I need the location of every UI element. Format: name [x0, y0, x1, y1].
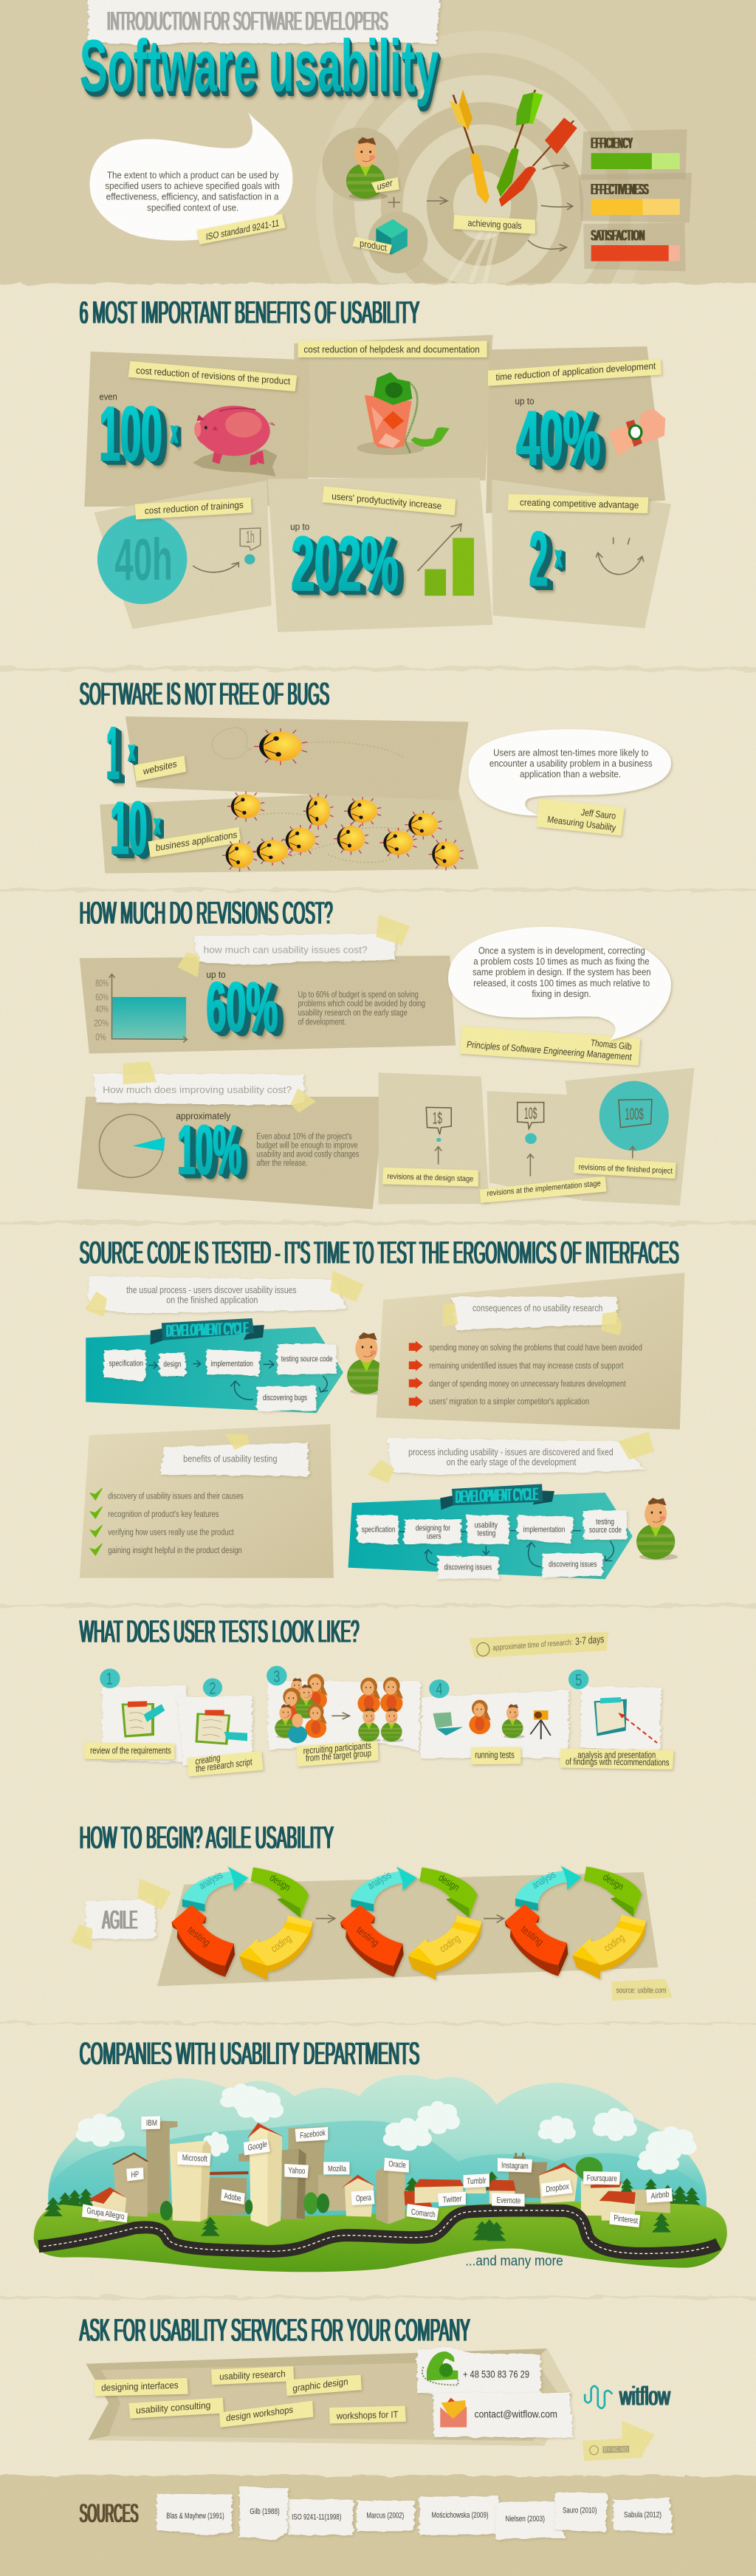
stat: 1x [106, 710, 135, 796]
label: users' prodytuctivity increase [331, 491, 441, 512]
chart: 60%: 40% [95, 1004, 109, 1015]
cycle labels: design [436, 1871, 461, 1893]
section: test ergonomics: discovery of usability issues and their causes [108, 1491, 244, 1501]
step 5 [560, 1670, 673, 1770]
stat: 100x: even [100, 392, 117, 402]
tape [71, 1878, 171, 1950]
chart: 60%: 20% [94, 1018, 109, 1029]
paper heading [194, 934, 396, 965]
service labels: workshops for IT [336, 2410, 398, 2422]
icon: telephone in a cup [357, 372, 450, 455]
paper heading [453, 1296, 617, 1330]
contact: phone [417, 2347, 541, 2398]
stage: 1$: 1$ [433, 1109, 442, 1128]
contact: email [433, 2393, 572, 2438]
cycle labels: coding [268, 1932, 293, 1954]
tape: research time [469, 1631, 608, 1658]
step 4: running tests [475, 1750, 515, 1761]
tape [443, 1303, 622, 1335]
section: services [80, 2312, 673, 2540]
source notes: Sabula (2012) [624, 2510, 662, 2519]
tape [85, 1271, 364, 1317]
speech bubble: Sauro: application than a website. [520, 769, 621, 780]
stage: 1$ [382, 1107, 478, 1187]
panel: consequences [376, 1272, 684, 1430]
label: source [537, 799, 625, 836]
source notes: Sauro (2010) [563, 2506, 597, 2515]
tape [177, 914, 410, 977]
cycle labels: testing [519, 1923, 546, 1948]
section: agile: AGILE [102, 1905, 137, 1934]
source notes: ISO 9241-11(1998) [292, 2512, 341, 2521]
stat: 10x [111, 786, 160, 871]
step 1: 1 [106, 1670, 113, 1688]
section: revision cost: 60% [207, 967, 278, 1046]
label: achieving goals: achieving goals [467, 218, 522, 231]
step 3: 3 [273, 1668, 280, 1685]
paper: usual process [89, 1276, 346, 1313]
text block: of development. [298, 1016, 346, 1027]
tape: source [611, 1979, 673, 2001]
paper strip [89, 0, 440, 45]
ribbon [440, 1484, 554, 1510]
section: user tests: review of the requirements [90, 1746, 171, 1756]
section: test ergonomics: testing source code [281, 1354, 333, 1363]
company signs: Pinterest [614, 2213, 638, 2225]
company signs: Oracle [388, 2159, 406, 2170]
step 4 [420, 1679, 569, 1764]
label [322, 486, 456, 515]
section: benefits: cost reduction of revisions of the product [136, 366, 290, 387]
section: test ergonomics: gaining insight helpful in the product design [108, 1545, 242, 1555]
section: companies [34, 2036, 727, 2272]
tape [368, 1432, 654, 1483]
section: test ergonomics: source code [589, 1525, 622, 1535]
section: bugs: 10 [111, 786, 147, 871]
user [322, 128, 399, 202]
section: revision cost [77, 896, 694, 1209]
step 2 [177, 1678, 264, 1776]
ribbon panel [86, 2349, 573, 2446]
company signs: Twitter [443, 2193, 462, 2205]
label [128, 361, 297, 391]
stage: 100$: 100$ [625, 1106, 644, 1123]
cycle labels: analysis [365, 1868, 393, 1891]
step 3: from the target group [306, 1748, 371, 1764]
stat: 202% [290, 520, 398, 608]
section: revision cost: usability and avoid costly changes [256, 1149, 360, 1159]
label: quote source [460, 1026, 640, 1066]
text block: after the release. [256, 1158, 308, 1168]
company signs: Tumblr [467, 2176, 486, 2186]
icon: wrist watch [608, 408, 665, 456]
stage: 100$ [574, 1081, 676, 1179]
stat: 100x [100, 390, 178, 478]
chart: pie [100, 1114, 165, 1177]
step 4: 4 [436, 1680, 443, 1698]
paper: usual process: on the finished application [166, 1295, 258, 1306]
sky and mountains [48, 2075, 707, 2221]
cycle 3 [505, 1866, 646, 1979]
steps: specification [362, 1524, 396, 1534]
stage: 10$: 10$ [524, 1105, 537, 1123]
cycle labels: analysis [196, 1868, 224, 1891]
icon: pig [193, 405, 278, 476]
service labels: graphic design [292, 2377, 348, 2394]
section: benefits: x [171, 413, 178, 451]
ribbon [151, 1318, 264, 1345]
chart: 60%: 80% [95, 979, 109, 989]
source notes: Nielsen (2003) [505, 2514, 545, 2524]
steps: users [427, 1531, 441, 1541]
stat: 40% [515, 394, 600, 482]
section: bugs: 1 [106, 710, 119, 796]
licence tape [583, 2421, 655, 2461]
plus and arrow [388, 197, 447, 208]
section: bugs: x [154, 806, 160, 841]
licence tape: BY-NC-ND [604, 2446, 628, 2453]
company signs: IBM [146, 2118, 157, 2128]
source notes [157, 2487, 673, 2540]
steps: discovering bugs [263, 1393, 307, 1402]
speech bubble: definition: specified context of use. [147, 202, 238, 213]
panels: stages [379, 1068, 694, 1205]
steps [357, 1510, 627, 1579]
cycle labels [186, 1868, 626, 1954]
flow arrows [399, 1531, 614, 1567]
section: user tests: the research script [196, 1757, 252, 1775]
company signs: Opera [356, 2193, 371, 2203]
paper heading: How much does improving usability cost? [103, 1084, 292, 1095]
cycle labels: coding [602, 1931, 626, 1953]
section: benefits: 2 [529, 515, 548, 603]
section: intro: ISO standard 9241-11 [206, 218, 279, 242]
icon: smile [596, 538, 644, 575]
cycle 2 [340, 1866, 481, 1980]
source notes: Blas & Mayhew (1991) [166, 2511, 224, 2521]
section: revision cost: budget will be enough to improve [256, 1140, 358, 1150]
company signs [82, 2116, 673, 2227]
logo: witflow [585, 2381, 670, 2411]
diagram: development cycle with usability [348, 1484, 633, 1579]
section: benefits: 202% [291, 520, 398, 608]
stat: 10% [176, 1110, 241, 1190]
label [148, 827, 241, 857]
company signs: HP [131, 2169, 139, 2179]
product [352, 212, 427, 273]
label: achieving goals [453, 215, 535, 234]
service labels: usability research [219, 2368, 286, 2383]
company signs: Adobe [224, 2190, 241, 2203]
text block [298, 990, 425, 1027]
cycle labels: testing [186, 1924, 213, 1948]
section: test ergonomics: verifying how users really use the product [108, 1527, 234, 1537]
panel: effectiveness [579, 173, 692, 223]
label [134, 756, 186, 781]
target rings [316, 31, 647, 284]
stat: 60% [207, 967, 278, 1046]
road [38, 2210, 718, 2253]
step 2: creating [195, 1753, 220, 1767]
section: services: SOURCES [80, 2498, 138, 2528]
section: bugs: x [128, 733, 135, 768]
panels [84, 335, 671, 632]
section: benefits: cost reduction of helpdesk and documentation [303, 344, 480, 355]
paper: usual process: the usual process - users discover usability issues [126, 1284, 297, 1295]
step 2: 2 [209, 1679, 216, 1697]
foreground trees and bushes [44, 2192, 671, 2241]
step 5: 5 [575, 1671, 582, 1689]
text block [256, 1131, 360, 1168]
steps [103, 1344, 337, 1411]
section: services: + 48 530 83 76 29 [463, 2368, 529, 2380]
paper: process including usability [388, 1438, 645, 1475]
service labels [94, 2366, 406, 2428]
section: test ergonomics [80, 1236, 684, 1579]
section: user tests: 3-7 days [575, 1633, 604, 1648]
speech bubble: Sauro [468, 729, 671, 815]
section: benefits [80, 295, 671, 632]
stat: 10%: approximately [176, 1111, 230, 1122]
darts [448, 90, 577, 283]
source notes: Marcus (2002) [366, 2511, 404, 2520]
section: revision cost: Thomas Gilb [591, 1038, 632, 1052]
section: revision cost: revisions at the design stage [387, 1171, 473, 1183]
background trees [55, 2157, 701, 2211]
cycle 1 [171, 1866, 313, 1980]
section: benefits: 40h [114, 527, 173, 592]
source notes: Gilb (1988) [250, 2507, 280, 2516]
section: test ergonomics: recognition of product's key features [108, 1509, 219, 1519]
contact: email: contact@witflow.com [475, 2408, 557, 2420]
section: revision cost: Even about 10% of the project's [256, 1131, 352, 1141]
speech bubble: Gilb: fixing in design. [532, 988, 591, 999]
icon: 1h arrow [193, 528, 261, 572]
character [347, 1332, 388, 1395]
section: bugs: business applications [156, 829, 237, 854]
section: intro: effectiveness, efficiency, and satisfaction in a [106, 191, 279, 202]
panel: improvement cost [77, 1097, 385, 1209]
section: revision cost: usability research on the early stage [298, 1007, 408, 1018]
section: benefits: 100 [100, 390, 162, 478]
steps: testing [596, 1517, 614, 1527]
steps: design [163, 1359, 182, 1368]
panel: benefits [80, 1424, 334, 1578]
section: agile [71, 1820, 673, 2001]
step 1 [84, 1668, 187, 1763]
label: cost reduction of trainings [145, 500, 244, 516]
service labels: design workshops [226, 2405, 293, 2424]
paper heading: how much can usability issues cost? [204, 945, 368, 956]
section: intro [80, 0, 692, 284]
label: websites [142, 758, 177, 777]
text: source: uxbite.com [616, 1986, 667, 1995]
section: revision cost: revisions at the implementation stage [487, 1179, 601, 1198]
company signs: Comarch [411, 2207, 436, 2219]
company signs: Mozilla [328, 2164, 346, 2174]
section: companies: Airbnb [651, 2189, 670, 2201]
stat: 60%: up to [207, 970, 226, 980]
tape [123, 1061, 316, 1113]
cycle labels: analysis [530, 1868, 557, 1891]
section: benefits: x [555, 538, 562, 575]
steps: implementation [523, 1524, 565, 1534]
buildings [89, 2121, 670, 2227]
service labels: usability consulting [136, 2400, 210, 2416]
stage: 10$ [480, 1103, 607, 1203]
character [636, 1498, 678, 1561]
steps: testing [478, 1528, 495, 1538]
steps: discovering issues [549, 1559, 597, 1569]
panel: satisfaction [583, 223, 686, 271]
company signs: Facebook [300, 2128, 326, 2140]
company signs: Google [248, 2139, 267, 2153]
section: test ergonomics: DEVELOPMENT CYCLE [166, 1319, 248, 1340]
company signs: Grupa Allegro [87, 2205, 125, 2222]
chart: 60%: 60% [95, 992, 109, 1003]
panel: issue cost [80, 956, 456, 1054]
paper: AGILE [86, 1899, 155, 1939]
steps: designing for [416, 1523, 450, 1532]
label: source: Jeff Sauro [580, 807, 616, 821]
section: bugs: Measuring Usability [547, 814, 616, 833]
source notes: Mościchowska (2009) [431, 2510, 489, 2520]
step 3 [267, 1666, 420, 1767]
panel [157, 1872, 658, 1986]
paper heading: benefits of usability testing [183, 1453, 278, 1465]
steps: specification [109, 1358, 143, 1368]
section: companies: ...and many more [465, 2253, 563, 2269]
company signs: Foursquare [587, 2173, 617, 2183]
section: revision cost: 10% [177, 1110, 241, 1190]
icon: growth chart [418, 524, 474, 596]
panels [100, 716, 478, 874]
arrows between cycles [316, 1915, 504, 1922]
section: benefits: 1h [246, 528, 255, 547]
product: product [360, 239, 387, 253]
cycle labels: design [601, 1871, 626, 1892]
tape [225, 1434, 250, 1450]
steps: usability [475, 1520, 498, 1530]
step 3: recruiting participants [303, 1741, 371, 1756]
service labels: designing interfaces [101, 2380, 179, 2394]
chart: 60% [94, 974, 187, 1043]
label: ISO [196, 213, 286, 244]
ground [34, 2202, 727, 2272]
speech bubble: definition [89, 112, 292, 241]
company signs: Instagram [501, 2160, 529, 2171]
speech bubble: Gilb [448, 927, 671, 1040]
panel: efficiency [581, 129, 687, 179]
diagram: development cycle [86, 1318, 343, 1413]
section: revision cost: Up to 60% of budget is spend on solving [298, 990, 419, 999]
company signs: Evernote [497, 2195, 520, 2205]
label [298, 341, 487, 357]
company signs: Dropbox [546, 2182, 569, 2194]
stat: 40%: up to [515, 397, 535, 407]
label [488, 359, 662, 386]
list: benefits [90, 1488, 244, 1555]
tape: research time: approximate time of research: [492, 1637, 573, 1652]
company signs: Yahoo [289, 2165, 305, 2176]
list: consequences [409, 1341, 642, 1408]
steps: implementation [210, 1359, 253, 1368]
label [508, 494, 648, 513]
section: intro: The extent to which a product can be used by [107, 170, 279, 181]
label [97, 497, 252, 604]
cycle labels: testing [354, 1924, 382, 1948]
stat: 2x [529, 515, 562, 603]
flow arrows [148, 1360, 328, 1400]
cycle labels: design [268, 1871, 293, 1893]
bugs [212, 727, 464, 871]
clouds [76, 2083, 697, 2174]
cycle labels: coding [437, 1932, 462, 1954]
paper heading [162, 1442, 309, 1476]
section: bugs [80, 676, 671, 874]
section: revision cost: problems which could be avoided by doing [298, 998, 425, 1008]
company signs: Microsoft [182, 2153, 207, 2163]
section: user tests [80, 1614, 673, 1776]
result arrows [528, 162, 573, 251]
section: intro: specified users to achieve specified goals with [105, 180, 280, 191]
steps: discovering issues [444, 1562, 492, 1572]
user: user [377, 178, 393, 192]
paper heading [93, 1074, 305, 1105]
chart: 60%: 0% [95, 1032, 106, 1043]
stat: 202%: up to [290, 521, 309, 532]
